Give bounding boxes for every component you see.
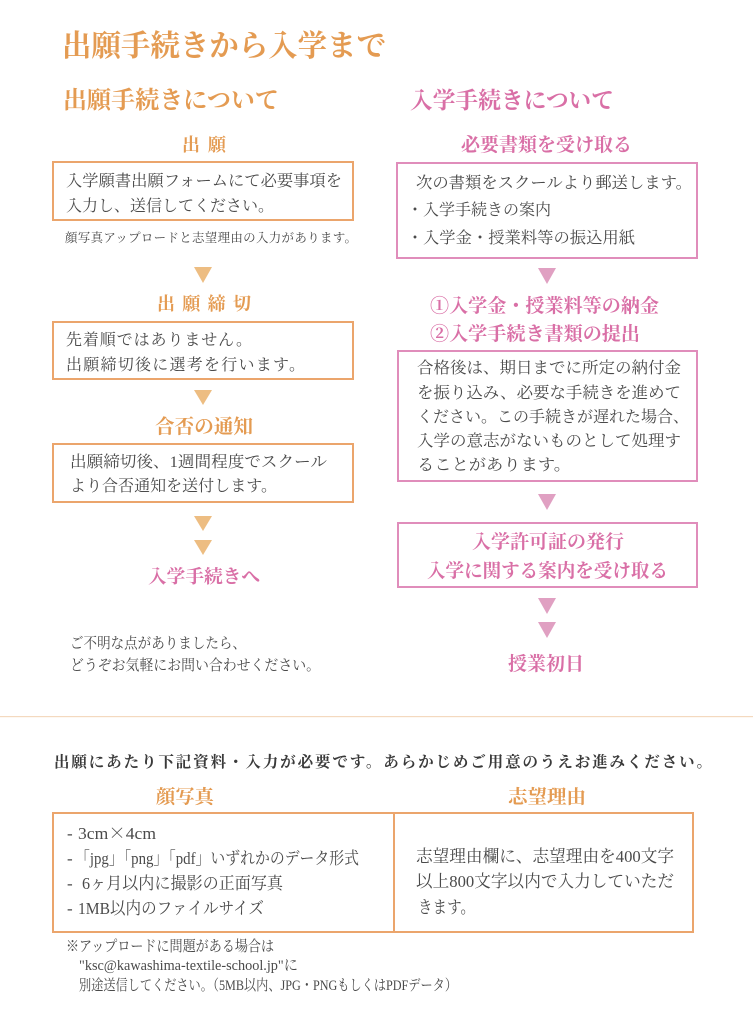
step box: payment details: ることがあります。 — [417, 456, 571, 474]
step heading: application: 出願 — [182, 135, 227, 155]
step box: documents: 入学金・授業料等の振込用紙 — [423, 229, 635, 247]
step box: payment details: ください。この手続きが遅れた場合、 — [417, 408, 689, 426]
notice heading: 出願にあたり下記資料・入力が必要です。あらかじめご用意のうえお進みください。 — [54, 752, 712, 771]
column heading: reason: 志望理由 — [508, 785, 586, 808]
step box: permit: 入学に関する案内を受け取る — [427, 560, 668, 582]
step box: documents: 入学手続きの案内 — [423, 201, 551, 219]
reason requirements: 以上800文字以内で入力していただ — [416, 872, 674, 891]
panel: enrolment procedure — [397, 88, 697, 675]
panel: required materials — [53, 752, 712, 994]
link label: to enrolment: 入学手続きへ — [148, 567, 260, 588]
step box: permit — [398, 523, 697, 587]
arrow — [194, 540, 212, 555]
upload note: 別途送信してください。（5MB以内、JPG・PNGもしくはPDFデータ） — [79, 977, 457, 994]
contact note — [70, 634, 320, 674]
table — [53, 813, 693, 932]
step box: deadline: 先着順ではありません。 — [66, 331, 252, 349]
arrow — [538, 598, 556, 614]
step box: payment details — [398, 351, 697, 481]
step heading: result: 合否の通知 — [155, 415, 253, 438]
reason requirements: 志望理由欄に、志望理由を400文字 — [416, 846, 674, 866]
note: upload: 顔写真アップロードと志望理由の入力があります。 — [65, 230, 357, 245]
upload note: "ksc@kawashima-textile-school.jp"に — [79, 958, 298, 974]
photo requirements: - — [67, 824, 73, 843]
photo requirements: - — [67, 899, 73, 918]
step heading: receive documents: 必要書類を受け取る — [461, 134, 632, 156]
arrow — [538, 622, 556, 638]
step box: documents: 次の書類をスクールより郵送します。 — [416, 174, 692, 192]
step box: permit: 入学許可証の発行 — [472, 531, 624, 553]
title: 出願手続きから入学まで — [62, 30, 386, 63]
contact note: ご不明な点がありましたら、 — [70, 634, 246, 652]
upload note: ※アップロードに問題がある場合は — [66, 938, 274, 955]
heading: enrolment procedure: 入学手続きについて — [410, 88, 614, 113]
photo requirements — [67, 819, 359, 918]
step box: documents: ・ — [407, 230, 423, 247]
step box: deadline — [53, 322, 353, 379]
step heading: first day: 授業初日 — [508, 653, 584, 675]
step box: result — [53, 444, 353, 502]
arrow — [194, 390, 212, 405]
step box: documents — [397, 163, 697, 258]
reason requirements — [416, 846, 674, 917]
step box: payment details: 合格後は、期日までに所定の納付金 — [417, 359, 681, 377]
photo requirements: - — [67, 849, 73, 868]
column heading: photo: 顔写真 — [156, 786, 216, 808]
step box: payment details: を振り込み、必要な手続きを進めて — [417, 384, 681, 402]
panel: application procedure — [53, 87, 357, 674]
step heading: payment and submission — [430, 295, 659, 345]
arrow — [538, 494, 556, 510]
arrow — [194, 516, 212, 531]
step box: result: 出願締切後、1週間程度でスクール — [70, 453, 327, 471]
arrow — [194, 267, 212, 283]
step heading: payment and submission: ②入学手続き書類の提出 — [430, 322, 640, 345]
step heading: payment and submission: ①入学金・授業料等の納金 — [430, 295, 659, 317]
contact note: どうぞお気軽にお問い合わせください。 — [70, 656, 320, 674]
step box: result: より合否通知を送付します。 — [70, 477, 277, 495]
step heading: deadline: 出願締切 — [157, 294, 251, 314]
step box: payment details: 入学の意志がないものとして処理す — [417, 432, 681, 450]
step box: application form — [53, 162, 353, 220]
photo requirements: 6ヶ月以内に撮影の正面写真 — [82, 874, 284, 893]
photo requirements: 1MB以内のファイルサイズ — [78, 899, 264, 918]
step box: application form: 入力し、送信してください。 — [66, 197, 274, 215]
reason requirements: きます。 — [418, 898, 475, 917]
upload note — [66, 938, 457, 994]
arrow — [538, 268, 556, 284]
heading: application procedure: 出願手続きについて — [63, 87, 279, 114]
photo requirements: - — [67, 874, 73, 893]
step box: documents: ・ — [407, 202, 423, 219]
step box: deadline: 出願締切後に選考を行います。 — [66, 356, 305, 374]
photo requirements: 「jpg」「png」「pdf」いずれかのデータ形式 — [75, 849, 359, 868]
photo requirements: 3cm×4cm — [78, 819, 156, 844]
step box: application form: 入学願書出願フォームにて必要事項を — [66, 172, 342, 190]
